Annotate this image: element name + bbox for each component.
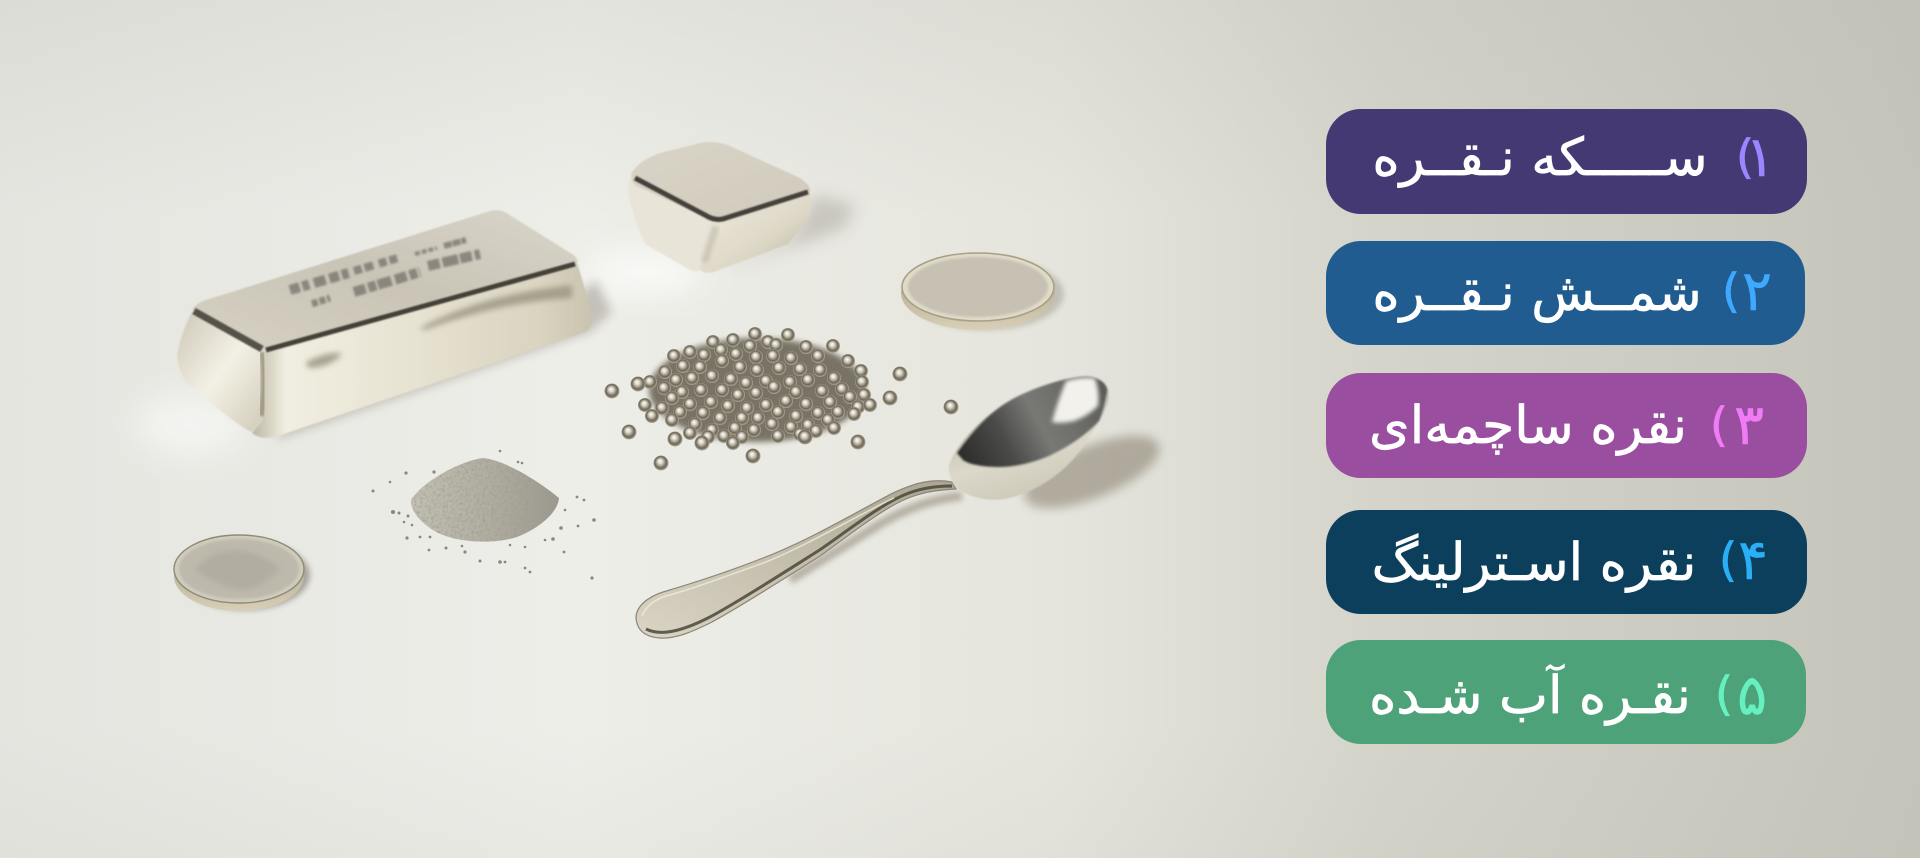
pill parenthesis: ) (1710, 398, 1728, 452)
bar left face (177, 312, 265, 432)
bar reflections (306, 285, 572, 368)
spoon (636, 377, 1168, 638)
cube front face (700, 192, 810, 273)
coin face (902, 253, 1054, 321)
label: silver bullion (1326, 241, 1805, 345)
pill parenthesis: ) (1715, 667, 1733, 721)
spoon handle (636, 481, 956, 638)
spoon handle ridges (646, 486, 952, 632)
shot underlay (649, 338, 865, 442)
pill number: ۴ (1738, 528, 1768, 593)
shot beads (604, 327, 958, 470)
powder scattered grains (372, 450, 596, 580)
pill parenthesis: ) (1736, 130, 1754, 184)
pill background (1326, 109, 1807, 214)
pill number: ۲ (1742, 259, 1772, 324)
pile of silver shot (604, 327, 958, 470)
coin shadow (908, 258, 1064, 330)
bar front face (252, 263, 592, 438)
pill number: ۵ (1737, 663, 1767, 728)
silver cube (628, 142, 855, 273)
pill number: ۱ (1745, 125, 1775, 190)
pill text: نقـره آب شـده (1369, 663, 1691, 726)
label: shot silver (1326, 373, 1807, 478)
pill background (1326, 241, 1805, 345)
powder mound (411, 458, 559, 542)
label: molten silver (1326, 640, 1806, 744)
label: silver coin (1326, 109, 1807, 214)
bar dark edge highlights (266, 264, 575, 350)
bar shadow (275, 280, 612, 440)
spoon bowl back (949, 377, 1109, 500)
bottom-left coin (174, 535, 310, 611)
pill parenthesis: ) (1719, 533, 1737, 587)
pill text: شمــش نـقــره (1372, 263, 1702, 323)
spoon handle shadow (790, 496, 962, 580)
coin rim (174, 541, 304, 611)
coin face (174, 535, 304, 603)
pill text: ســـــکه نـقــره (1372, 128, 1708, 188)
silver bar (177, 210, 612, 440)
bar top face (192, 210, 577, 350)
spoon bowl shadow (1016, 421, 1168, 523)
pill text: نقره اسـترلینگ (1372, 533, 1696, 593)
cube top face (631, 142, 810, 220)
pill number: ۳ (1734, 393, 1764, 458)
silver powder pile (372, 450, 596, 580)
label: sterling silver (1326, 510, 1807, 614)
cube shadow (720, 195, 855, 270)
pill background (1326, 510, 1807, 614)
coin shadow (180, 540, 310, 610)
pill background (1326, 373, 1807, 478)
spoon bowl highlight (1052, 377, 1099, 423)
loose beads (604, 384, 620, 398)
cube dark edge highlights (635, 178, 808, 219)
pill background (1326, 640, 1806, 744)
pill text: نقره ساچمه‌ای (1369, 396, 1687, 456)
bar engraving (290, 240, 480, 304)
pill parenthesis: ) (1722, 264, 1740, 318)
cube left face (628, 178, 720, 271)
spoon bowl inside (957, 377, 1107, 467)
coin rim (901, 256, 1055, 330)
top-right coin (901, 253, 1064, 330)
